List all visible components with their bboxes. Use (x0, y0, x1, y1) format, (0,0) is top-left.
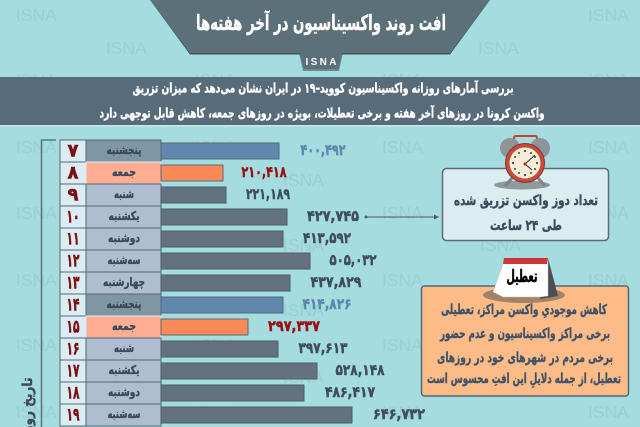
text: ISNA (480, 170, 521, 190)
text: ISNA (16, 335, 57, 355)
text: ISNA (588, 335, 629, 355)
row 18: ۱۸ (66, 382, 80, 404)
text: ISNA (588, 5, 629, 25)
dose text line 2: طی ۲۴ ساعت (490, 218, 562, 234)
row 15: ۲۹۷,۳۳۷ (268, 317, 320, 335)
text: ISNA (195, 70, 236, 90)
row 11 (60, 228, 351, 250)
text: ISNA (480, 235, 521, 255)
row 10 (60, 206, 359, 228)
row 12: سه‌شنبه (108, 253, 140, 267)
calendar label: تعطیل (506, 267, 538, 287)
ISNA tab (299, 53, 343, 71)
icon: alarm clock (494, 136, 550, 190)
text: ISNA (382, 335, 423, 355)
text: ISNA (588, 402, 629, 422)
row 14 (60, 294, 352, 316)
row 16 (60, 338, 348, 360)
text: ISNA (283, 170, 324, 190)
row 19: ۶۴۶,۷۳۲ (373, 405, 425, 423)
ISNA tab: ISNA (306, 57, 336, 68)
table and bar chart (60, 140, 425, 426)
row 14: پنجشنبه (106, 297, 142, 311)
row 8: ۲۱۰,۴۱۸ (242, 163, 286, 181)
text: ISNA (106, 38, 147, 58)
row 10: ۴۲۷,۷۴۵ (307, 207, 359, 225)
row 16: ۳۹۷,۶۱۳ (298, 339, 348, 357)
row 18 (60, 382, 375, 404)
row 13: ۴۳۷,۸۲۹ (310, 273, 362, 291)
row 17: ۵۲۸,۱۴۸ (336, 361, 384, 379)
row 8: جمعه (112, 165, 136, 179)
arrow to dose box (364, 214, 439, 220)
text: ISNA (588, 203, 629, 223)
row 11: دوشنبه (108, 231, 140, 246)
text: ISNA (382, 70, 423, 90)
row 14: ۴۱۴,۸۲۶ (302, 295, 352, 313)
row 16: ۱۶ (66, 338, 80, 360)
text: ISNA (16, 203, 57, 223)
title: افت روند واکسیناسیون در آخر هفته‌ها (196, 10, 446, 35)
icon: holiday calendar (483, 258, 565, 303)
row 10: ۱۰ (66, 206, 80, 228)
row 9: شنبه (114, 187, 134, 201)
text: ISNA (195, 137, 236, 157)
row 12: ۱۲ (66, 250, 80, 272)
row 8: ۸ (68, 162, 78, 184)
row 13: چهارشنبه (103, 275, 145, 289)
row 14: ۱۴ (66, 294, 80, 316)
text: ISNA (588, 270, 629, 290)
text: ISNA (478, 38, 519, 58)
text: ISNA (382, 402, 423, 422)
panel: daily dose box (442, 168, 608, 240)
row 15: ۱۵ (66, 316, 80, 338)
text: ISNA (16, 5, 57, 25)
row 7: ۷ (68, 140, 78, 162)
row 15: جمعه (112, 319, 136, 333)
row 9: ۹ (68, 184, 78, 206)
row 9: ۲۲۱,۱۸۹ (246, 185, 290, 203)
intro band (0, 77, 640, 126)
text: ISNA (16, 270, 57, 290)
text: ISNA (382, 270, 423, 290)
row 17 (60, 360, 384, 382)
text: ISNA (16, 402, 57, 422)
text: ISNA (195, 402, 236, 422)
row 7: ۴۰۰,۴۹۲ (300, 141, 346, 159)
text: ISNA (283, 367, 324, 387)
text: ISNA (588, 70, 629, 90)
text: ISNA (16, 137, 57, 157)
date axis bracket and label (20, 140, 56, 427)
row 19 (60, 404, 425, 426)
row 7 (60, 140, 346, 162)
row 18: ۴۸۶,۴۱۷ (325, 383, 375, 401)
text: ISNA (382, 203, 423, 223)
title banner (150, 0, 490, 54)
row 19: سه‌شنبه (108, 407, 140, 421)
text: ISNA (16, 70, 57, 90)
row 8 (60, 162, 286, 184)
row 10: یکشنبه (108, 209, 140, 223)
row 18: دوشنبه (108, 385, 140, 400)
text: ISNA (382, 137, 423, 157)
row 11: ۱۱ (66, 228, 80, 250)
panel: holiday explanation box (422, 286, 628, 396)
text: ISNA (588, 137, 629, 157)
row 13 (60, 272, 362, 294)
row 9 (60, 184, 290, 206)
row 7: پنجشنبه (106, 143, 142, 157)
row 12: ۵۰۵,۰۳۲ (330, 251, 376, 269)
row 17: یکشنبه (108, 363, 140, 377)
row 17: ۱۷ (66, 360, 80, 382)
intro line 1: بررسی آمارهای روزانه واکسیناسیون کووید–۱۹ در ایران نشان می‌دهد که میزان تزریق (133, 80, 514, 96)
row 12 (60, 250, 376, 272)
text: ISNA (283, 235, 324, 255)
text: ISNA (195, 335, 236, 355)
row 19: ۱۹ (66, 404, 80, 426)
row 11: ۴۱۳,۵۹۲ (303, 229, 351, 247)
row 16: شنبه (114, 341, 134, 355)
text: ISNA (283, 300, 324, 320)
row 13: ۱۳ (66, 272, 80, 294)
row 15 (60, 316, 320, 338)
